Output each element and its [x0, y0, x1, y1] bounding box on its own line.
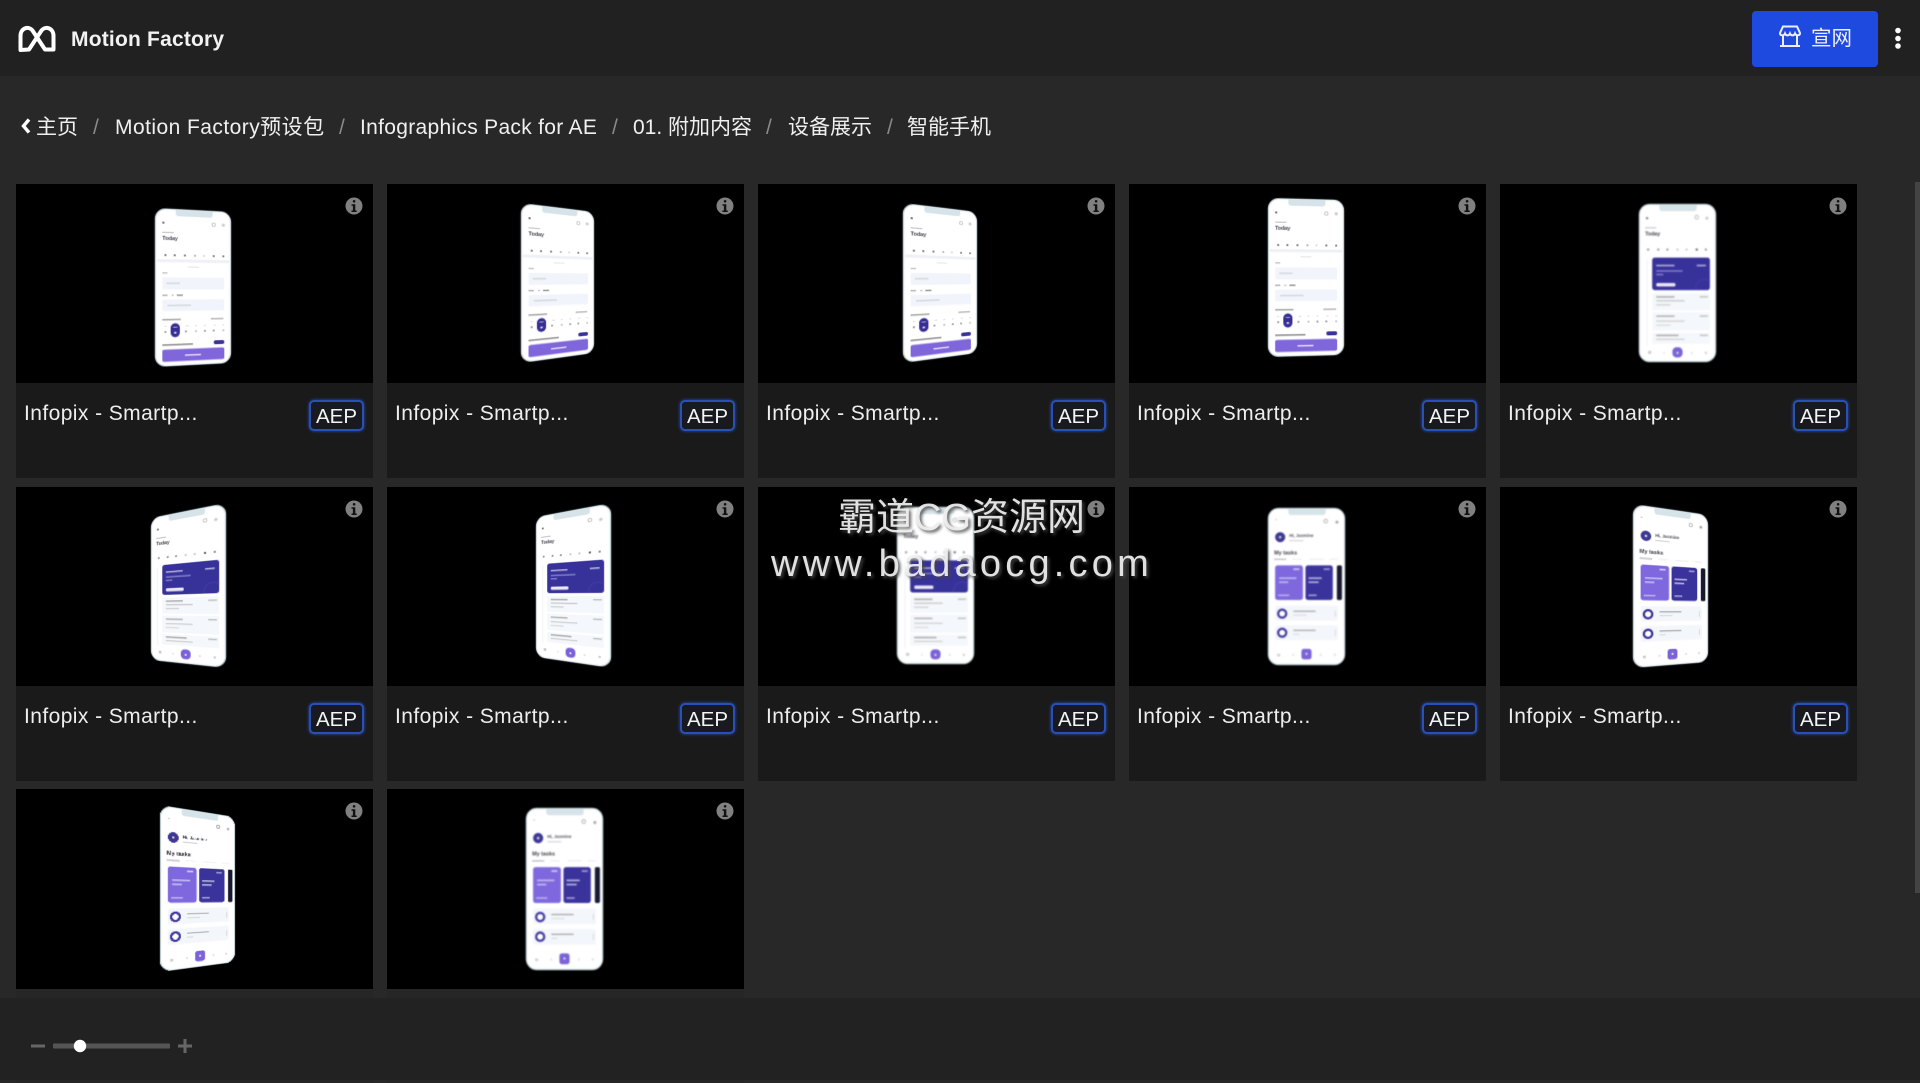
button: official site: 宣网	[1811, 27, 1852, 50]
text: /	[93, 116, 99, 139]
card 6: Infopix - Smartp...	[24, 705, 198, 728]
breadcrumb	[21, 118, 30, 134]
icon: more menu	[1895, 28, 1901, 49]
card 3	[758, 184, 1115, 478]
card 5: Infopix - Smartp...	[1508, 402, 1682, 425]
card 9	[1129, 487, 1486, 781]
watermark url: www.badaocg.com	[771, 543, 1153, 585]
text: 设备展示	[788, 116, 872, 139]
card 1: AEP	[316, 405, 357, 428]
card 7: AEP	[687, 708, 728, 731]
card 8: AEP	[1058, 708, 1099, 731]
icon: back chevron	[21, 118, 30, 134]
card 4: Infopix - Smartp...	[1137, 402, 1311, 425]
card 3: Infopix - Smartp...	[766, 402, 940, 425]
card 10	[1500, 487, 1857, 781]
text: 主页	[36, 116, 78, 139]
bottom toolbar	[0, 998, 1920, 1080]
card 7	[387, 487, 744, 781]
card 10: Infopix - Smartp...	[1508, 705, 1682, 728]
card 11	[16, 789, 373, 1083]
card 4	[1129, 184, 1486, 478]
text: /	[766, 116, 772, 139]
card 7: Infopix - Smartp...	[395, 705, 569, 728]
card 8: Infopix - Smartp...	[766, 705, 940, 728]
card 6	[16, 487, 373, 781]
brand name: Motion Factory	[71, 28, 224, 51]
card 2: AEP	[687, 405, 728, 428]
card 2: Infopix - Smartp...	[395, 402, 569, 425]
card 1	[16, 184, 373, 478]
text: /	[339, 116, 345, 139]
button: official site	[1752, 11, 1878, 67]
text: Motion Factory预设包	[115, 116, 325, 139]
icon: Motion Factory logo	[18, 26, 56, 52]
card 9: AEP	[1429, 708, 1470, 731]
text: 01. 附加内容	[633, 116, 752, 139]
text: /	[612, 116, 618, 139]
card 3: AEP	[1058, 405, 1099, 428]
card 6: AEP	[316, 708, 357, 731]
text: /	[887, 116, 893, 139]
card 12	[387, 789, 744, 1083]
icon: store	[1779, 26, 1801, 47]
header bar	[0, 0, 1920, 76]
zoom slider	[31, 1039, 192, 1053]
scrollbar	[1915, 182, 1920, 893]
card 9: Infopix - Smartp...	[1137, 705, 1311, 728]
text: Infographics Pack for AE	[360, 116, 597, 139]
card 1: Infopix - Smartp...	[24, 402, 198, 425]
card 5: AEP	[1800, 405, 1841, 428]
text: 智能手机	[907, 116, 991, 139]
card 10: AEP	[1800, 708, 1841, 731]
card 5	[1500, 184, 1857, 478]
card 8	[758, 487, 1115, 781]
watermark title: 霸道CG资源网	[838, 497, 1085, 539]
card 2	[387, 184, 744, 478]
card 4: AEP	[1429, 405, 1470, 428]
